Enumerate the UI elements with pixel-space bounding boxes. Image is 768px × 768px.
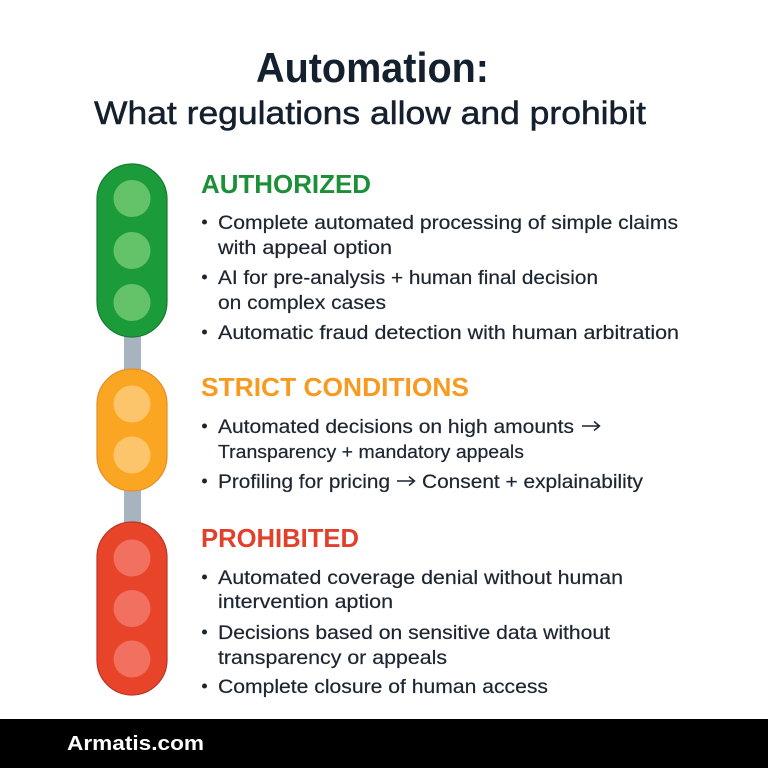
- footer brand: Armatis.com: [67, 733, 204, 755]
- heading: authorized: AUTHORIZED: [201, 169, 371, 199]
- section: prohibited: [201, 523, 623, 698]
- bullet list: authorized: [202, 212, 679, 344]
- bullet list: authorized: Complete automated processing of simple claims: [218, 212, 678, 234]
- bullet list: authorized: with appeal option: [217, 237, 392, 259]
- bullet list: strict conditions: [202, 416, 643, 493]
- bullet list: prohibited: [202, 567, 623, 698]
- bullet list: strict conditions: Profiling for pricing: [218, 471, 390, 493]
- section: authorized: [201, 169, 679, 344]
- arrow: pricing to consent: [397, 476, 414, 486]
- connector pole: green to orange: [124, 335, 141, 371]
- bullet list: authorized: on complex cases: [218, 292, 386, 314]
- title: Automation:: [256, 44, 489, 91]
- bullet list: authorized: AI for pre-analysis + human final decision: [218, 267, 598, 289]
- bullet list: authorized: Automatic fraud detection with human arbitration: [218, 322, 679, 344]
- section: strict conditions: [201, 372, 643, 493]
- subtitle: What regulations allow and prohibit: [94, 95, 646, 131]
- icon: orange traffic light: [97, 369, 167, 491]
- icon: red traffic light: [97, 522, 167, 695]
- bullet list: strict conditions: Transparency + mandatory appeals: [218, 441, 524, 462]
- bullet list: strict conditions: Consent + explainability: [422, 471, 643, 493]
- bullet list: prohibited: Complete closure of human access: [218, 676, 548, 698]
- icon: green traffic light: [97, 164, 167, 337]
- bullet list: strict conditions: Automated decisions on high amounts: [218, 416, 574, 438]
- bullet list: prohibited: transparency or appeals: [218, 647, 447, 669]
- bullet list: prohibited: Decisions based on sensitive data without: [218, 622, 611, 644]
- heading: strict conditions: STRICT CONDITIONS: [201, 372, 469, 402]
- bullet list: prohibited: intervention aption: [218, 591, 393, 613]
- footer bar: [0, 719, 768, 768]
- bullet list: prohibited: Automated coverage denial without human: [218, 567, 623, 589]
- heading: prohibited: PROHIBITED: [201, 523, 359, 553]
- connector pole: orange to red: [124, 489, 141, 524]
- arrow: amounts to transparency: [582, 422, 600, 430]
